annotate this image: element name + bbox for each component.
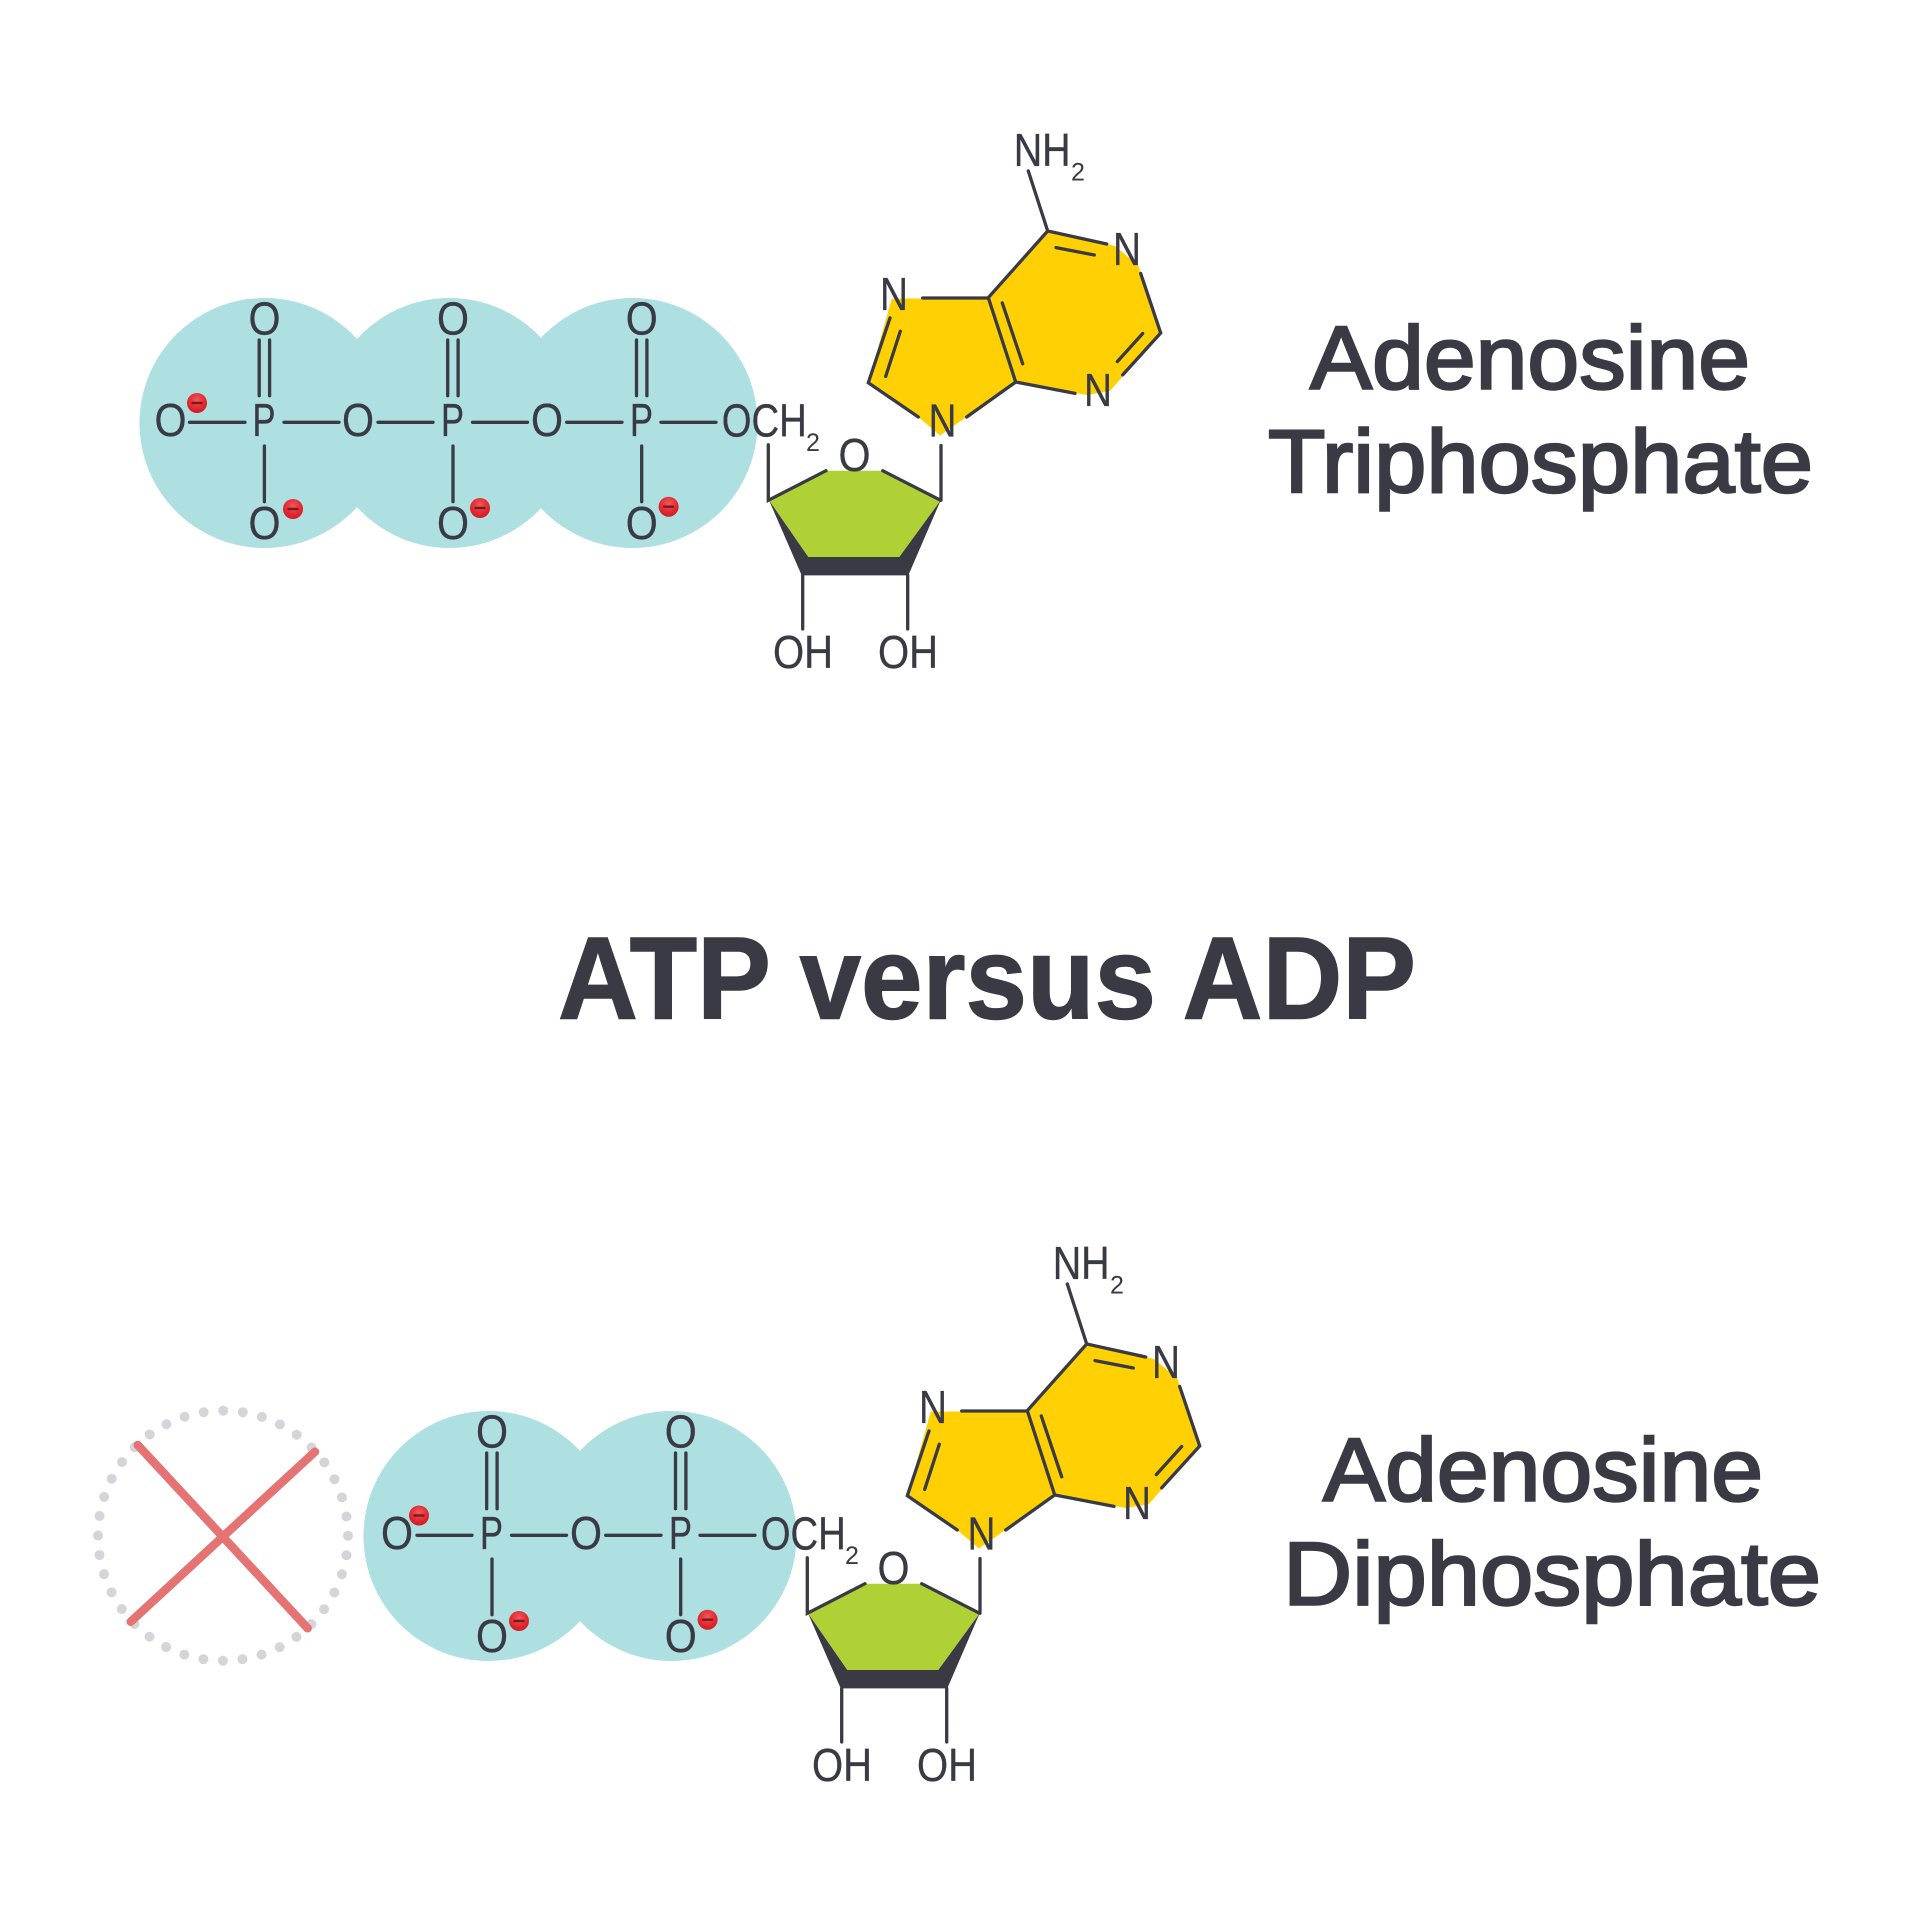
heading: Adenosine Diphosphate: Adenosine: [1323, 1420, 1763, 1520]
phosphate atom labels: O: [626, 292, 658, 344]
ribose sugar ring: OH: [878, 626, 938, 678]
adenine ring: N: [880, 268, 908, 320]
phosphate atom labels: O: [476, 1406, 508, 1458]
phosphate atom labels: [154, 292, 658, 549]
ribose sugar ring: OCH: [722, 394, 807, 446]
title: ATP versus ADP: [558, 913, 1416, 1044]
phosphate atom labels: O: [626, 497, 658, 549]
phosphate atom labels: O: [342, 394, 374, 446]
adenine ring: NH: [1053, 1237, 1110, 1289]
ribose sugar ring: [761, 1508, 980, 1791]
adenine ring: [907, 1237, 1200, 1560]
adenine ring: N: [1152, 1336, 1180, 1388]
phosphate atom labels: P: [669, 1507, 692, 1559]
ribose sugar ring: OH: [812, 1739, 872, 1791]
ribose sugar ring: 2: [845, 1542, 859, 1570]
phosphate atom labels: P: [480, 1507, 503, 1559]
phosphate atom labels: O: [248, 292, 280, 344]
adenine ring: N: [919, 1381, 947, 1433]
adenine ring: 2: [1110, 1271, 1124, 1299]
adenine ring: [868, 124, 1161, 446]
phosphate atom labels: O: [437, 497, 469, 549]
ribose sugar ring: OCH: [761, 1508, 846, 1560]
panel: adenosine triphosphate molecule: [140, 124, 1161, 678]
heading: Adenosine Triphosphate: Triphosphate: [1268, 411, 1813, 511]
panel: adenosine diphosphate molecule: [364, 1237, 1200, 1791]
negative charge badges: [187, 393, 679, 519]
heading: Adenosine Triphosphate: [1268, 307, 1813, 511]
negative charge badges: [409, 1506, 718, 1631]
ribose sugar ring: O: [878, 1542, 910, 1594]
phosphate atom labels: P: [441, 394, 464, 446]
icon: removed phosphate, dotted circle with red cross: [98, 1411, 348, 1661]
heading: Adenosine Triphosphate: Adenosine: [1310, 307, 1750, 407]
adenine ring: NH: [1014, 124, 1071, 176]
ribose sugar ring: [722, 394, 941, 678]
phosphate atom labels: P: [630, 394, 653, 446]
phosphate group background circles: [140, 298, 758, 548]
adenine ring: 2: [1071, 158, 1085, 186]
phosphate atom labels: O: [665, 1406, 697, 1458]
ribose sugar ring: OH: [773, 626, 833, 678]
phosphate atom labels: O: [248, 497, 280, 549]
heading: Adenosine Diphosphate: Diphosphate: [1283, 1523, 1821, 1623]
phosphate atom labels: O: [437, 292, 469, 344]
adenine ring: N: [968, 1508, 996, 1560]
ribose sugar ring: 2: [806, 429, 820, 457]
adenine ring: N: [1084, 364, 1112, 416]
phosphate atom labels: O: [154, 394, 186, 446]
phosphate atom labels: O: [665, 1610, 697, 1662]
phosphate atom labels: [381, 1406, 697, 1662]
phosphate atom labels: O: [570, 1507, 602, 1559]
ribose sugar ring: OH: [917, 1739, 977, 1791]
heading: Adenosine Diphosphate: [1283, 1420, 1821, 1623]
phosphate atom labels: P: [252, 394, 276, 446]
phosphate group background circles: [364, 1411, 796, 1661]
phosphate bonds: [190, 340, 716, 502]
phosphate atom labels: O: [531, 394, 563, 446]
phosphate atom labels: O: [381, 1507, 413, 1559]
phosphate bonds: [417, 1453, 755, 1615]
adenine ring: N: [1123, 1477, 1151, 1529]
adenine ring: N: [928, 394, 956, 446]
ribose sugar ring: O: [838, 429, 870, 481]
phosphate atom labels: O: [476, 1610, 508, 1662]
adenine ring: N: [1113, 223, 1141, 275]
